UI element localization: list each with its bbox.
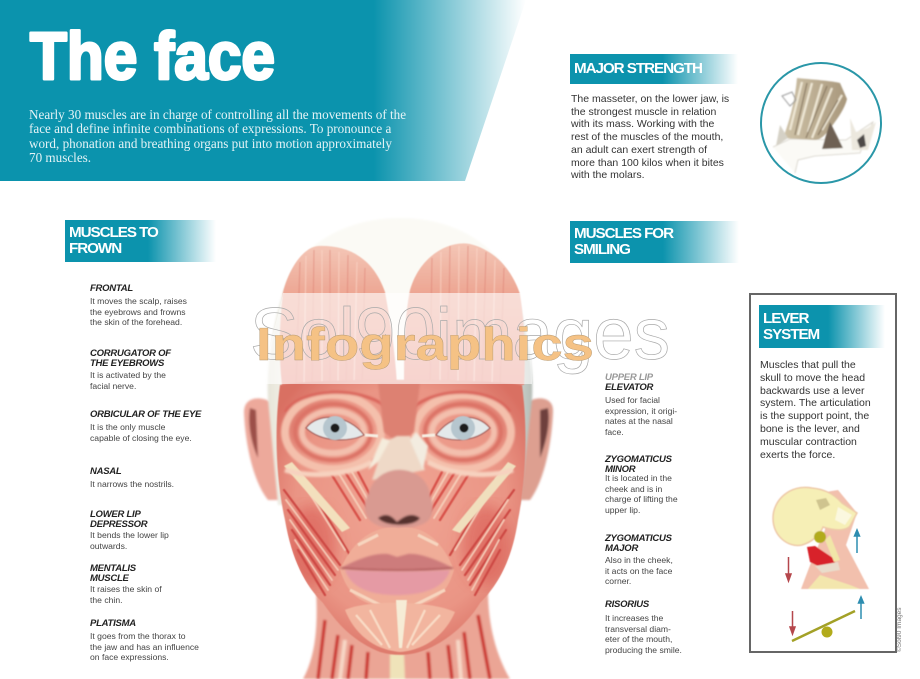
corrugator: It is activated by the facial nerve. — [90, 370, 166, 391]
illustration: head lever — [772, 486, 870, 642]
watermark: Sol90images — [250, 294, 670, 375]
nasal: NASAL — [90, 466, 121, 477]
blue arrow lower — [858, 597, 864, 619]
muscle list: frown — [90, 283, 202, 662]
chin — [345, 600, 455, 652]
mentalis — [90, 563, 162, 605]
heading: major strength — [570, 54, 738, 84]
heading: muscles for smiling — [570, 221, 739, 263]
zygomaticus minor: ZYGOMATICUS MINOR — [605, 454, 672, 474]
lips — [341, 554, 453, 595]
heading: muscles to frown: MUSCLES TO FROWN — [69, 224, 158, 256]
muscle list: smiling — [604, 372, 682, 655]
nasal: It narrows the nostrils. — [90, 479, 174, 489]
heading: major strength: MAJOR STRENGTH — [574, 60, 702, 77]
zygomaticus major — [604, 533, 673, 586]
cheek shading — [288, 505, 510, 585]
mentalis: MENTALIS MUSCLE — [90, 563, 136, 584]
lower lip depressor — [90, 509, 169, 551]
zygomaticus strips — [284, 462, 516, 533]
header banner — [0, 0, 521, 181]
heading: lever system — [759, 305, 885, 348]
orbicular: ORBICULAR OF THE EYE — [90, 409, 201, 420]
intro text: Nearly 30 muscles are in charge of controlling all the movements of the face and define infinite combinations of expressions. To pronounce a word, phonation and breathing organs put into motion approximately 70 muscles. — [29, 107, 406, 165]
lever text: Muscles that pull the skull to move the head backwards use a lever system. The articulation is the support point, the bone is the lever, and muscular contraction exerts the force. — [760, 359, 871, 461]
upper lip elevator — [605, 372, 677, 437]
face muscle mass — [277, 380, 525, 655]
corrugator: CORRUGATOR OF THE EYEBROWS — [90, 348, 171, 368]
risorius: It increases the transversal diam- eter of the mouth, producing the smile. — [605, 613, 682, 655]
major strength text: The masseter, on the lower jaw, is the strongest muscle in relation with its mass. Working with the rest of the muscles of the mouth, an adult can exert strength of more than 100 kilos when it bites with the molars. — [571, 93, 729, 181]
zygomaticus major: Also in the cheek, it acts on the face corner. — [605, 555, 673, 586]
orbicular — [90, 409, 202, 443]
lower lip depressor: It bends the lower lip outwards. — [90, 530, 169, 551]
mentalis: It raises the skin of the chin. — [90, 584, 162, 605]
eye orbit muscles — [285, 392, 513, 474]
red arrow upper — [786, 557, 791, 581]
skull — [268, 218, 532, 505]
zygomaticus minor — [604, 454, 678, 515]
nasal — [90, 466, 174, 489]
joint — [814, 531, 826, 543]
skull — [773, 487, 857, 545]
heading: muscles to frown — [65, 220, 216, 262]
orbicular: It is the only muscle capable of closing the eye. — [90, 422, 192, 443]
illustration: face muscles — [242, 219, 554, 679]
glabella — [378, 383, 420, 445]
panel: major strength — [570, 54, 736, 181]
upper lip elevator: UPPER LIP ELEVATOR — [605, 372, 653, 392]
zygomaticus major: ZYGOMATICUS MAJOR — [605, 533, 672, 554]
nose — [365, 432, 433, 529]
neck muscle — [807, 546, 836, 567]
eyes — [306, 416, 490, 440]
ears — [244, 398, 553, 500]
heading: lever system: LEVER SYSTEM — [763, 310, 819, 342]
red arrow lower — [790, 611, 795, 634]
zygomaticus minor: It is located in the cheek and is in charge of lifting the upper lip. — [605, 473, 678, 515]
lower lip depressor: LOWER LIP DEPRESSOR — [90, 509, 147, 530]
lever beam — [792, 611, 855, 641]
watermark: Infographics — [256, 318, 594, 370]
heading: muscles for smiling: MUSCLES FOR SMILING — [574, 225, 673, 258]
platisma: It goes from the thorax to the jaw and has an influence on face expressions. — [90, 631, 199, 662]
forehead muscles — [280, 243, 525, 385]
neck skin — [801, 490, 869, 589]
corrugator — [90, 348, 172, 391]
platisma: PLATISMA — [90, 618, 136, 629]
frontal: FRONTAL — [90, 283, 133, 294]
watermark band — [266, 293, 532, 384]
blue arrow upper — [854, 530, 860, 553]
credit: ©Sol90 Images — [896, 607, 903, 652]
panel: lever system — [749, 293, 897, 653]
frontal: It moves the scalp, raises the eyebrows and frowns the skin of the forehead. — [90, 296, 187, 327]
upper lip elevator: Used for facial expression, it origi- nates at the nasal face. — [605, 395, 677, 437]
icon: masseter circle — [760, 62, 882, 184]
neck — [303, 590, 510, 679]
risorius: RISORIUS — [605, 599, 649, 610]
mouth area — [340, 527, 454, 608]
cheek fibres — [284, 472, 514, 595]
